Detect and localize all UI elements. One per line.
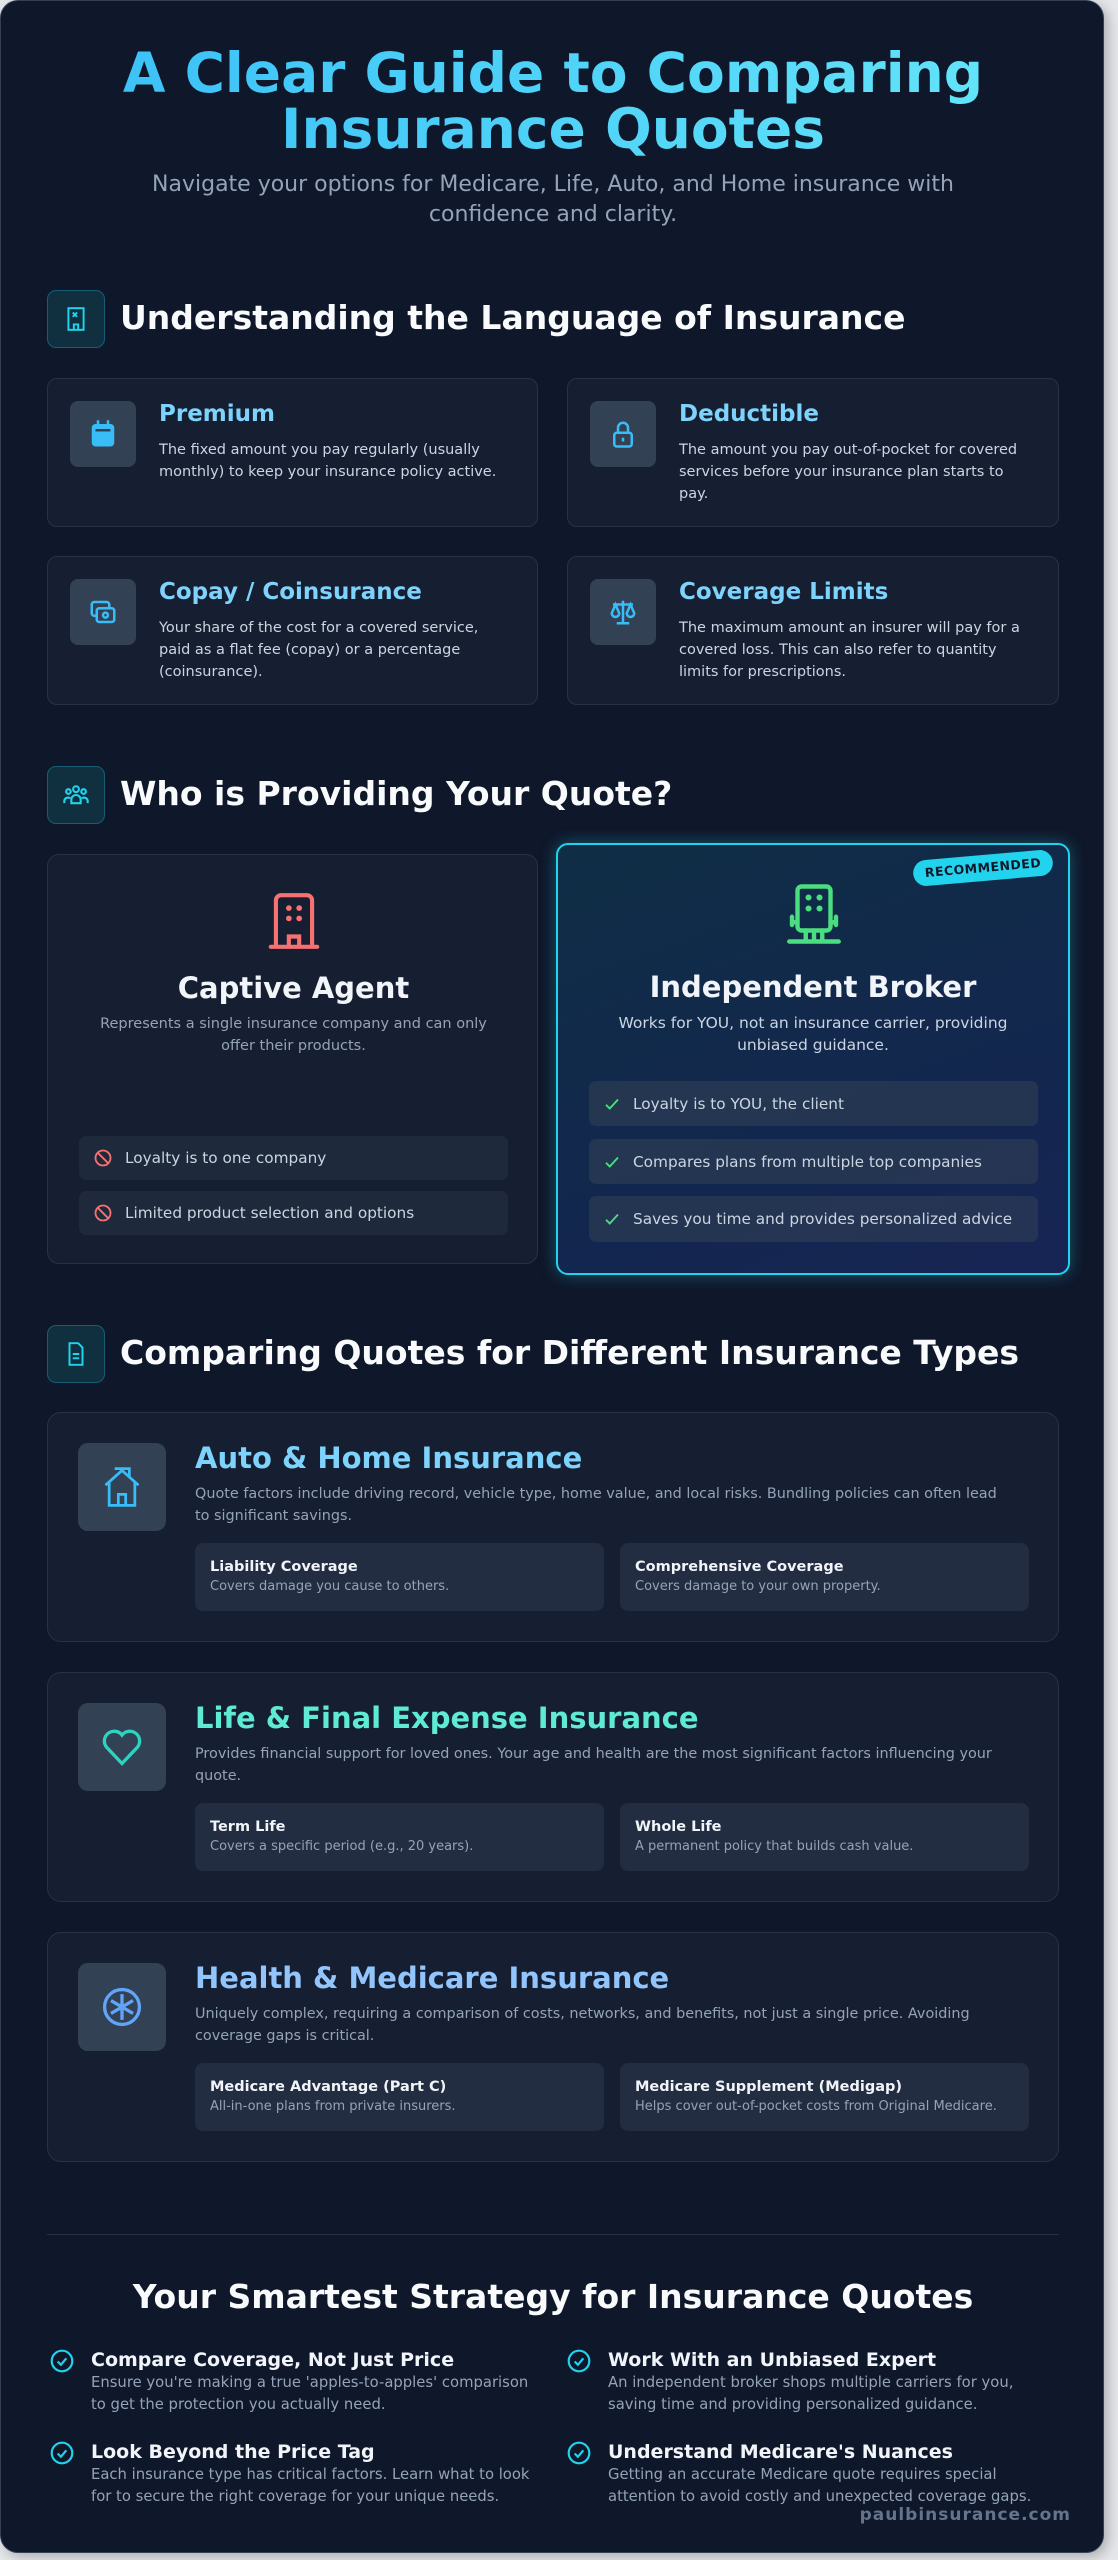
sub-box: advantage: All-in-one plans from private insurers. — [210, 2099, 456, 2114]
icon: scales — [590, 579, 656, 645]
section header: providers — [47, 766, 672, 824]
bullet: compares — [589, 1139, 1038, 1184]
bullet: saves: Saves you time and provides personalized advice — [633, 1210, 1012, 1228]
badge: recommended — [912, 849, 1054, 887]
title: Insurance Quotes — [281, 97, 825, 161]
panel: health & medicare: Uniquely complex, requiring a comparison of costs, networks, and benefits, not just a single price. Avoiding coverage gaps is critical. — [195, 2006, 970, 2044]
card: copay: Copay / Coinsurance — [159, 579, 422, 605]
card: deductible: Deductible — [679, 401, 819, 427]
bullet: loyalty — [79, 1136, 508, 1180]
bullet: saves — [589, 1196, 1038, 1242]
card: premium: Premium — [159, 401, 275, 427]
sub-box: liability — [195, 1543, 604, 1611]
sub-box: liability: Liability Coverage — [210, 1559, 358, 1575]
sub-box: supplement: Medicare Supplement (Medigap) — [635, 2079, 902, 2095]
icon: medical — [78, 1963, 166, 2051]
bullet: limited — [79, 1191, 508, 1235]
card: coverage limits: Coverage Limits — [679, 579, 888, 605]
card: deductible — [567, 378, 1059, 527]
heading: Comparing Quotes for Different Insurance Types — [120, 1333, 1019, 1372]
subtitle: Navigate your options for Medicare, Life, Auto, and Home insurance with confidence and clarity. — [152, 172, 954, 227]
bullet: compares: Compares plans from multiple top companies — [633, 1152, 982, 1170]
bullet: loyalty: Loyalty is to YOU, the client — [633, 1094, 844, 1112]
panel: auto & home: Quote factors include driving record, vehicle type, home value, and local risks. Bundling policies can often lead to significant savings. — [195, 1486, 997, 1524]
title: Independent Broker — [650, 970, 976, 1004]
description: Represents a single insurance company and can only offer their products. — [100, 1016, 487, 1054]
card: copay — [47, 556, 538, 705]
icon: green building — [787, 884, 841, 944]
bullet: loyalty — [589, 1081, 1038, 1126]
sub-box: term — [195, 1803, 604, 1871]
sub-box: advantage — [195, 2063, 604, 2131]
description: Works for YOU, not an insurance carrier, providing unbiased guidance. — [618, 1014, 1007, 1054]
text: Each insurance type has critical factors. Learn what to look for to secure the right coverage for your unique needs. — [91, 2466, 529, 2505]
heading: Understanding the Language of Insurance — [120, 298, 906, 337]
icon: document — [47, 1325, 105, 1383]
strategy: expert: Work With an Unbiased Expert — [608, 2349, 936, 2371]
text: Ensure you're making a true 'apples-to-apples' comparison to get the protection you actually need. — [91, 2374, 528, 2413]
text: Getting an accurate Medicare quote requires special attention to avoid costly and unexpected coverage gaps. — [608, 2466, 1031, 2505]
panel: life: Life & Final Expense Insurance — [195, 1701, 699, 1735]
text: An independent broker shops multiple carriers for you, saving time and providing personalized guidance. — [608, 2374, 1013, 2413]
icon: people — [47, 766, 105, 824]
card: premium: The fixed amount you pay regularly (usually monthly) to keep your insurance policy active. — [159, 442, 496, 480]
panel: auto & home: Auto & Home Insurance — [195, 1441, 582, 1475]
sub-box: advantage: Medicare Advantage (Part C) — [210, 2079, 446, 2095]
bullet: limited: Limited product selection and options — [125, 1204, 414, 1222]
sub-box: supplement — [620, 2063, 1029, 2131]
card: coverage limits: The maximum amount an insurer will pay for a covered loss. This can also refer to quantity limits for prescriptions. — [679, 620, 1020, 680]
panel: life: Provides financial support for loved ones. Your age and health are the most significant factors influencing your quote. — [195, 1746, 992, 1784]
title: Captive Agent — [178, 971, 409, 1005]
heading: Who is Providing Your Quote? — [120, 774, 672, 813]
sub-box: whole: A permanent policy that builds cash value. — [635, 1839, 913, 1854]
icon: house — [78, 1443, 166, 1531]
badge: recommended: RECOMMENDED — [924, 855, 1042, 880]
panel: independent broker — [556, 843, 1070, 1275]
panel: auto & home — [47, 1412, 1059, 1642]
icon: calendar — [70, 401, 136, 467]
sub-box: comprehensive — [620, 1543, 1029, 1611]
icon: money — [70, 579, 136, 645]
panel: captive agent — [47, 854, 538, 1264]
strategy: expert — [568, 2349, 1013, 2413]
title: A Clear Guide to Comparing — [123, 41, 983, 105]
strategy: price tag — [50, 2441, 530, 2505]
icon: building — [47, 290, 105, 348]
sub-box: term: Covers a specific period (e.g., 20 years). — [210, 1839, 473, 1854]
sub-box: comprehensive: Comprehensive Coverage — [635, 1559, 844, 1575]
sub-box: comprehensive: Covers damage to your own property. — [635, 1579, 881, 1594]
strategy: compare — [50, 2349, 528, 2413]
section header: language — [47, 290, 906, 348]
icon: heart — [78, 1703, 166, 1791]
strategy: medicare — [568, 2441, 1031, 2505]
bullet: loyalty: Loyalty is to one company — [125, 1149, 326, 1167]
panel: health & medicare: Health & Medicare Insurance — [195, 1961, 669, 1995]
card: coverage limits — [567, 556, 1059, 705]
strategy: compare: Compare Coverage, Not Just Price — [91, 2349, 454, 2371]
icon: lock — [590, 401, 656, 467]
strategy: medicare: Understand Medicare's Nuances — [608, 2441, 953, 2463]
footer: website: paulbinsurance.com — [860, 2505, 1071, 2525]
sub-box: liability: Covers damage you cause to others. — [210, 1579, 449, 1594]
card: premium — [47, 378, 538, 527]
card: deductible: The amount you pay out-of-pocket for covered services before your insurance plan starts to pay. — [679, 442, 1017, 502]
panel: health & medicare — [47, 1932, 1059, 2162]
section header: types — [47, 1325, 1019, 1383]
title — [1, 45, 1105, 157]
sub-box: term: Term Life — [210, 1819, 285, 1835]
strategy: price tag: Look Beyond the Price Tag — [91, 2441, 375, 2463]
icon: red building — [268, 893, 320, 949]
panel: life — [47, 1672, 1059, 1902]
sub-box: whole: Whole Life — [635, 1819, 721, 1835]
sub-box: whole — [620, 1803, 1029, 1871]
heading: strategy: Your Smartest Strategy for Insurance Quotes — [133, 2277, 973, 2316]
sub-box: supplement: Helps cover out-of-pocket costs from Original Medicare. — [635, 2099, 997, 2114]
card: copay: Your share of the cost for a covered service, paid as a flat fee (copay) or a percentage (coinsurance). — [159, 620, 478, 680]
